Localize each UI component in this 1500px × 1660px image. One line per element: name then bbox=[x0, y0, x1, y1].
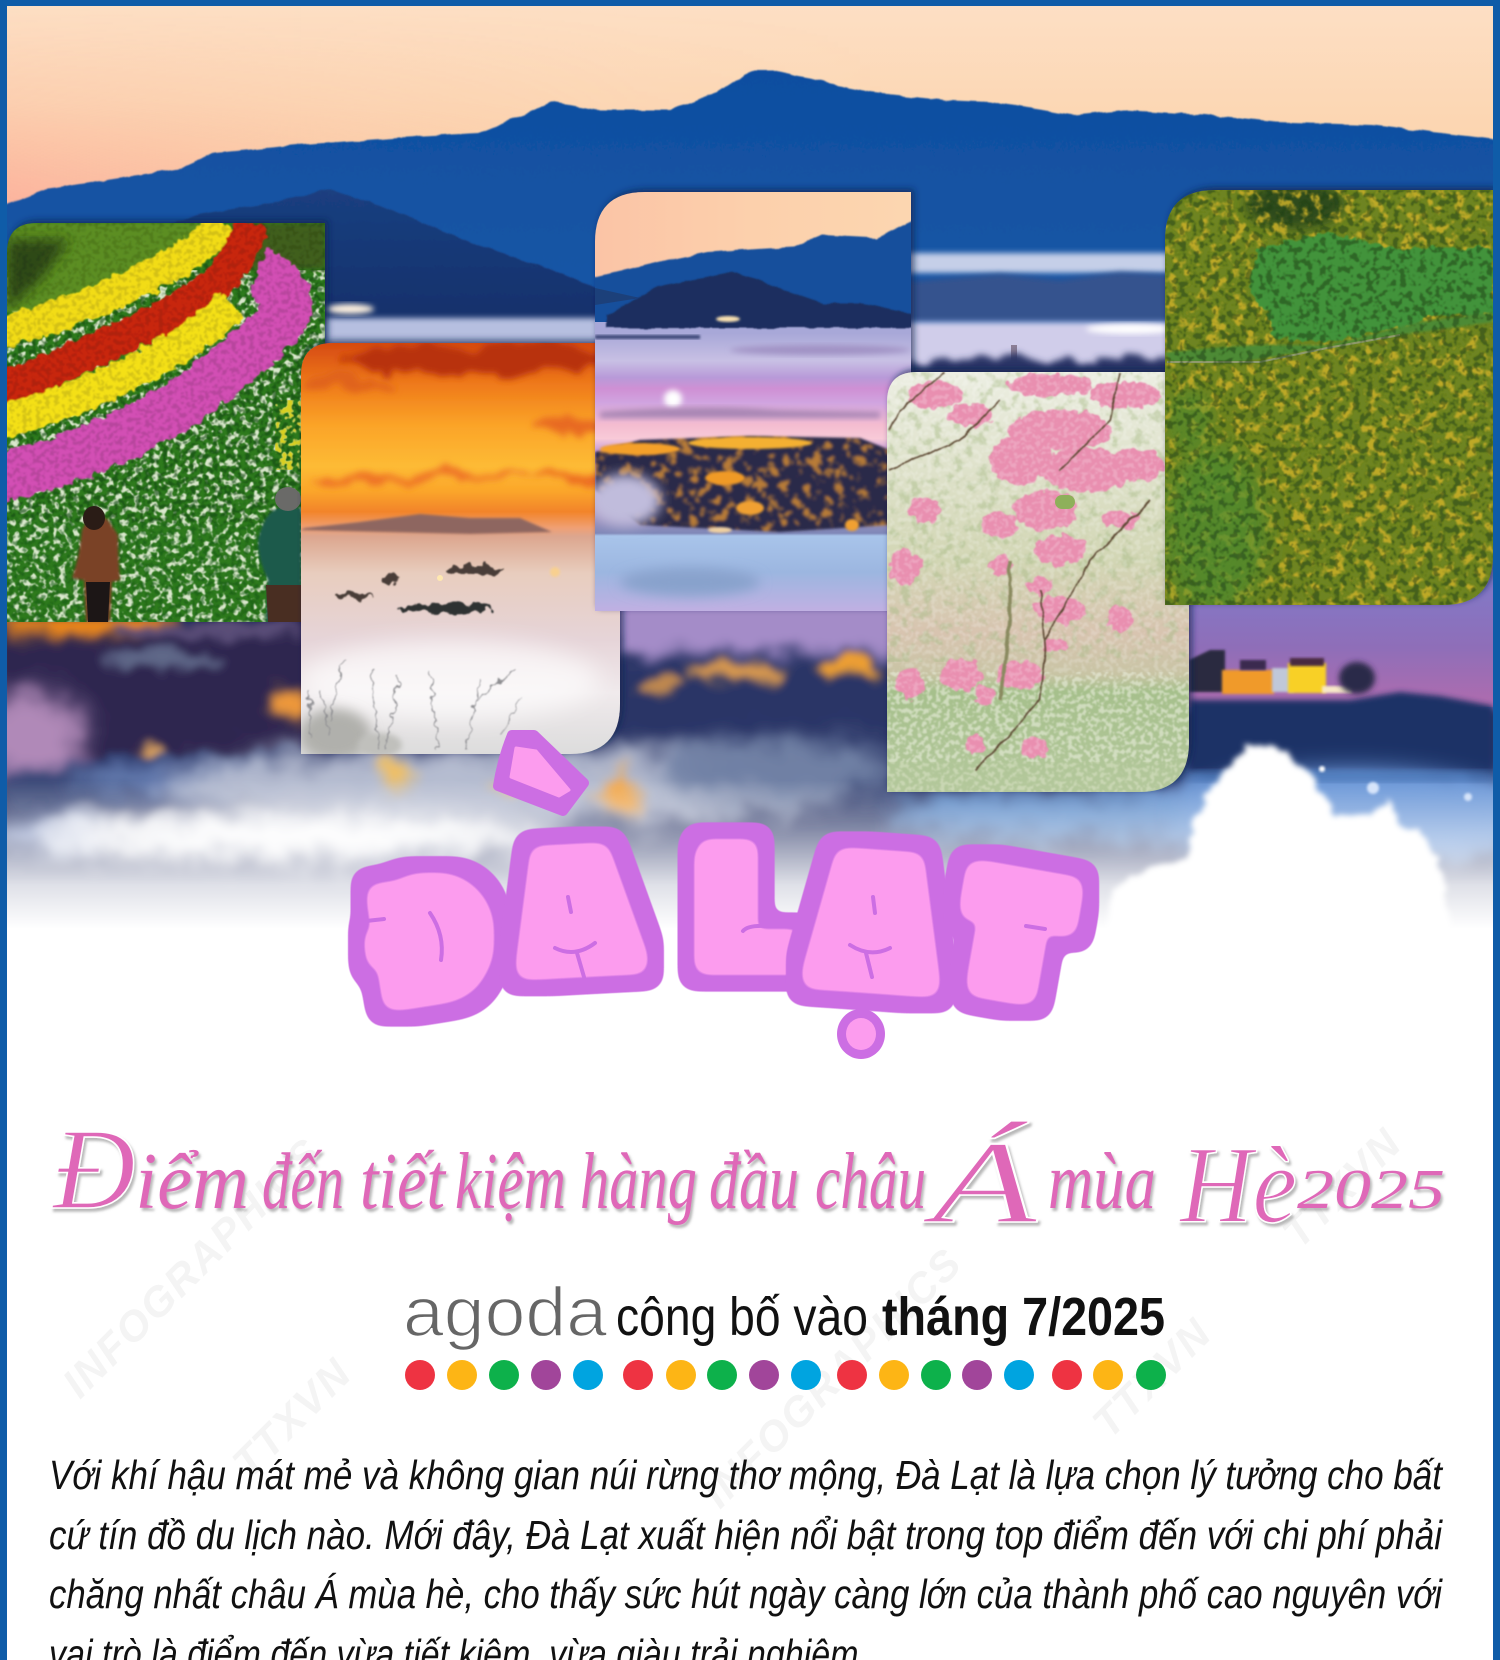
announcement line bbox=[616, 1287, 1165, 1347]
mountain ridge bbox=[7, 68, 1493, 344]
photo: flower garden bbox=[0, 222, 325, 622]
main title: Đà Lạt: Ạ bbox=[815, 841, 934, 1017]
dark foreground hill bbox=[150, 189, 600, 325]
lower night city bbox=[7, 348, 1493, 918]
subtitle script line: đến bbox=[262, 1138, 344, 1226]
watermarks bbox=[53, 1119, 1411, 1516]
subtitle script line: đầu bbox=[709, 1138, 799, 1226]
intro paragraph bbox=[49, 1452, 1444, 1660]
agoda colour dots bbox=[405, 1360, 1166, 1390]
agoda logo wordmark: agoda bbox=[403, 1273, 607, 1351]
announcement line: công bố vào bbox=[616, 1287, 868, 1347]
main title: Đà Lạt: Đ bbox=[364, 849, 497, 1031]
photo: night city in clouds bbox=[585, 192, 930, 611]
mist bands behind photos bbox=[325, 314, 595, 344]
subtitle script line: châu bbox=[815, 1138, 926, 1226]
subtitle script line: 2025 bbox=[1297, 1159, 1445, 1221]
photo: cherry blossoms bbox=[887, 372, 1189, 792]
photo: sunset over fog bbox=[295, 343, 650, 761]
right sky and hilltop buildings bbox=[1189, 610, 1493, 707]
grave accent mark bbox=[498, 735, 584, 811]
watermarks: INFOGRAPHICS bbox=[693, 1238, 971, 1516]
main title: Đà Lạt: À bbox=[521, 826, 638, 1000]
subtitle script line: mùa bbox=[1048, 1138, 1156, 1226]
people bbox=[72, 516, 120, 622]
watermarks: TTXVN bbox=[223, 1349, 361, 1486]
dot below mark bbox=[837, 1009, 885, 1059]
subtitle script line: tiết bbox=[360, 1138, 446, 1226]
main title: Đà Lạt: T bbox=[955, 847, 1074, 1029]
main title: Đà Lạt: L bbox=[696, 826, 788, 994]
blossom clusters bbox=[889, 374, 1165, 758]
subtitle script line: hàng bbox=[580, 1138, 697, 1226]
watermarks: TTXVN bbox=[1273, 1119, 1411, 1256]
white cloud bbox=[1110, 740, 1448, 918]
subtitle script line: kiệm bbox=[455, 1138, 566, 1226]
subtitle script line: Hè bbox=[1178, 1124, 1297, 1246]
main title: Đà Lạt bbox=[364, 735, 1075, 1059]
watermarks: INFOGRAPHICS bbox=[53, 1128, 331, 1406]
photo: wild sunflower hills bbox=[1163, 181, 1493, 615]
subtitle script line: Điểm bbox=[51, 1106, 249, 1234]
hero background landscape bbox=[7, 6, 1493, 918]
announcement line: tháng 7/2025 bbox=[882, 1287, 1165, 1347]
subtitle script line bbox=[51, 1106, 1445, 1248]
watermarks: TTXVN bbox=[1083, 1309, 1221, 1446]
subtitle script line: Á bbox=[922, 1117, 1038, 1248]
